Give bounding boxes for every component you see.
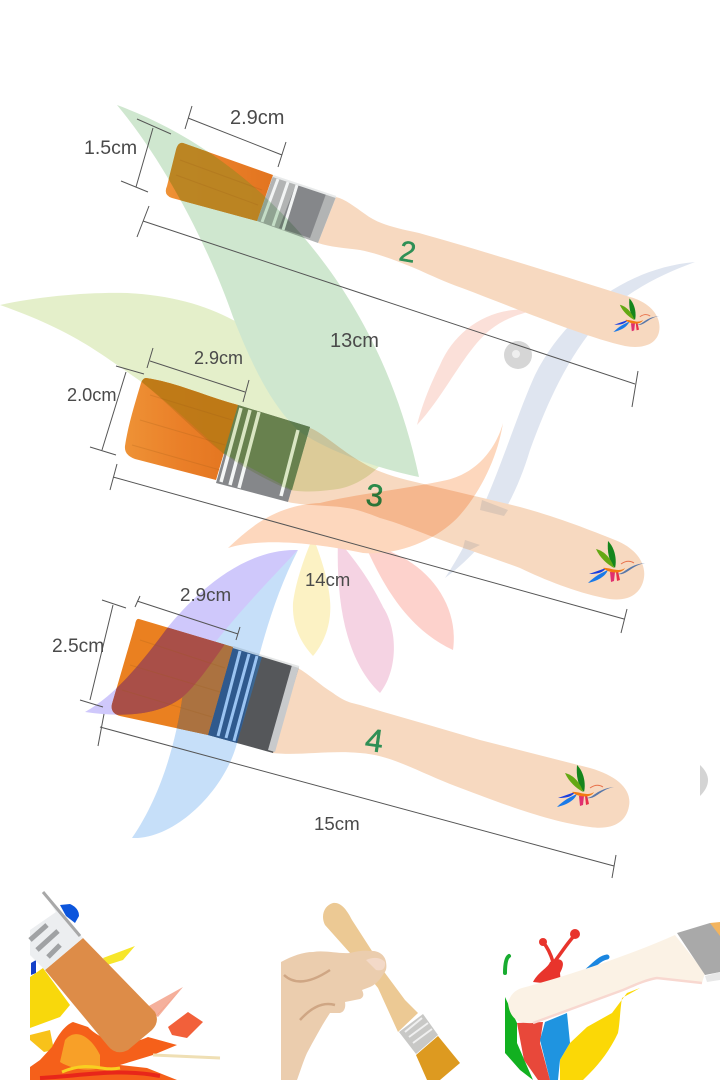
brush 3 (125, 378, 645, 599)
label 14cm: 14cm (305, 569, 350, 590)
watermark: green leaves (0, 105, 419, 492)
hummingbird logo (613, 298, 659, 332)
ferrule (30, 892, 83, 970)
hummingbird logo (557, 765, 614, 807)
ferrule (257, 176, 336, 243)
photo: brush over paint splash (505, 922, 720, 1080)
ferrule (677, 923, 720, 975)
brush 2 (166, 143, 660, 347)
dimensions: brush 2 (84, 106, 638, 407)
yellow paint (560, 988, 640, 1080)
blue paint (588, 957, 607, 970)
label 2.0cm: 2.0cm (67, 385, 117, 405)
brush 4 bristles under purple leaf (112, 628, 224, 715)
thumbnail (366, 958, 385, 970)
photo: brush painting orange and yellow (30, 892, 220, 1080)
ferrule (216, 405, 310, 502)
handle number 2: 2 (397, 235, 418, 270)
hummingbird logo (588, 541, 645, 583)
label 15cm: 15cm (314, 813, 360, 834)
label 2.5cm: 2.5cm (52, 636, 104, 657)
bristles (125, 378, 238, 480)
handle (272, 668, 629, 828)
red paint (533, 959, 563, 985)
paint splashes (60, 904, 79, 923)
brush 4 (112, 619, 629, 828)
handle number 4: 4 (363, 721, 386, 759)
bristles (166, 143, 273, 221)
bristles (45, 938, 157, 1052)
handle (508, 935, 705, 1023)
ferrule (399, 1014, 438, 1054)
label 2.9cm: 2.9cm (230, 107, 284, 129)
grey dot (504, 341, 532, 369)
edge fragment (700, 765, 708, 796)
handle (288, 428, 644, 599)
green paint (505, 956, 509, 973)
hand (281, 951, 386, 1080)
dimensions: brush 4 (52, 584, 616, 878)
watermark: blue and purple leaves (85, 550, 298, 838)
label 2.9cm: 2.9cm (194, 348, 243, 368)
photo: hand holding brush (281, 903, 460, 1080)
bristles (416, 1036, 460, 1080)
brush 4 bristles under blue leaf (176, 642, 233, 735)
watermark: pale pink and blue-grey swooshes (417, 262, 695, 578)
watermark: orange leaf and petals (228, 423, 503, 693)
handle number 3: 3 (364, 477, 385, 514)
small blue-grey patches on brush 3 handle (463, 500, 508, 550)
ferrule (208, 647, 299, 753)
finger creases (284, 970, 335, 1020)
brush 2 bristles under green leaf (168, 142, 266, 221)
label 1.5cm: 1.5cm (84, 137, 137, 159)
brush 3 bristles under yellow-green leaf (142, 378, 238, 454)
dimensions: brush 3 (67, 348, 627, 633)
label 13cm: 13cm (330, 330, 379, 352)
label 2.9cm: 2.9cm (180, 584, 231, 605)
bristle streaks (122, 160, 262, 717)
bristles (112, 619, 233, 735)
bristles (710, 922, 720, 936)
handle (318, 197, 660, 347)
handle (323, 903, 418, 1032)
